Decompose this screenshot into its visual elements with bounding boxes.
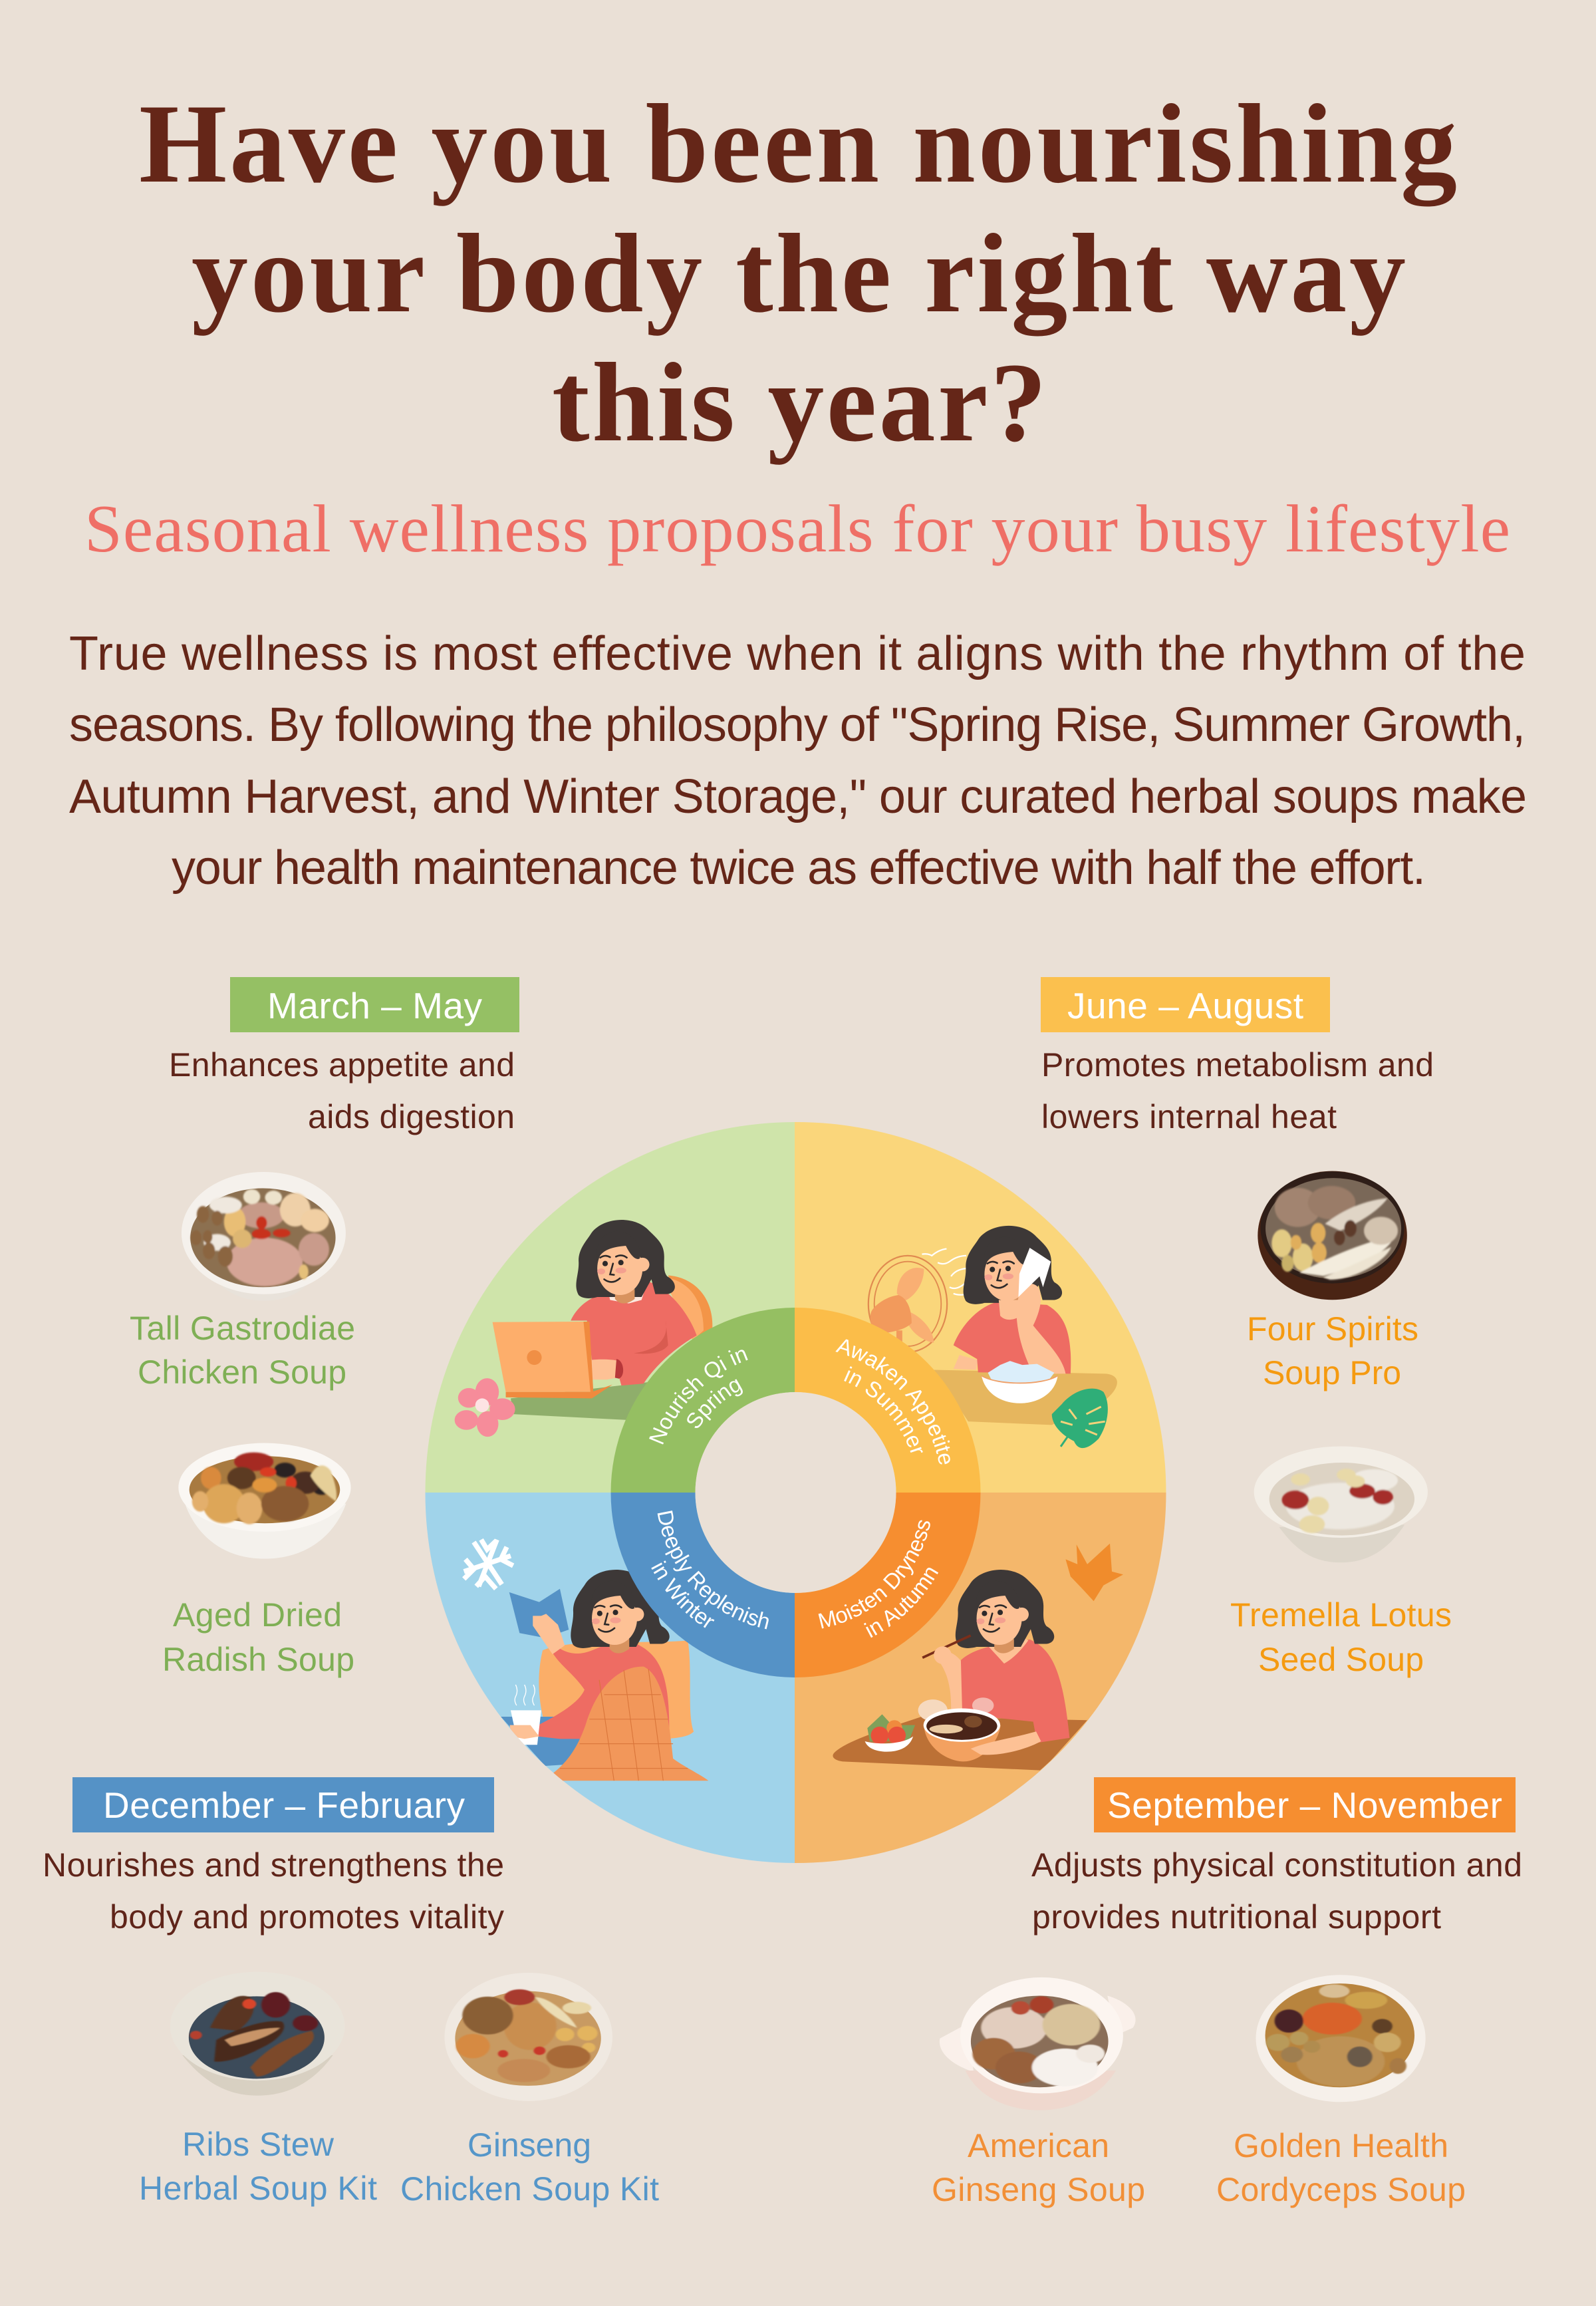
autumn benefit text: Adjusts physical constitution and: [1031, 1846, 1522, 1884]
soup label: american ginseng soup: [932, 2127, 1145, 2208]
soup label: four spirits soup pro: [1247, 1310, 1418, 1391]
blanket: [543, 1667, 708, 1781]
soup photo: ribs stew herbal soup kit: [170, 1972, 345, 2096]
soup photo: tremella lotus seed soup: [1254, 1446, 1428, 1562]
soup label: golden health cordyceps soup: Golden Health: [1234, 2127, 1448, 2164]
soup label: ginseng chicken soup kit: Chicken Soup Kit: [400, 2170, 659, 2208]
icon: fruit plate: [865, 1714, 915, 1752]
soup photo: american ginseng soup: [940, 1977, 1136, 2110]
season tag: June – August: June – August: [1067, 985, 1303, 1026]
icon: snowflake: [464, 1540, 513, 1589]
wheel quadrant: autumn background: [795, 1493, 1166, 1863]
illustration: autumn woman eating soup: [833, 1570, 1087, 1771]
inner ring: summer segment: [795, 1308, 980, 1493]
panel: summer: [1041, 977, 1452, 1678]
wheel quadrant: summer background: [795, 1122, 1166, 1493]
season tag: March – May: March – May: [267, 985, 483, 1026]
inner ring: autumn segment: [795, 1493, 980, 1677]
soup photo: aged dried radish soup: [178, 1443, 351, 1559]
ring label: summer: Awaken Appetite: [835, 1340, 950, 1465]
autumn benefit text: provides nutritional support: [1032, 1898, 1441, 1936]
soup label: american ginseng soup: American: [968, 2127, 1109, 2164]
soup label: tremella lotus seed soup: [1230, 1596, 1452, 1678]
soup label: aged dried radish soup: Radish Soup: [162, 1641, 354, 1678]
winter benefit text: body and promotes vitality: [110, 1898, 504, 1936]
season tag: September – November: [1094, 1777, 1516, 1832]
inner ring: spring segment: [610, 1308, 795, 1493]
summer benefit text: lowers internal heat: [1041, 1098, 1337, 1135]
illustration: summer woman with fan and ice bowl: [868, 1226, 1117, 1425]
soup label: golden health cordyceps soup: Cordyceps Soup: [1216, 2171, 1466, 2208]
season tag: June – August: [1041, 977, 1330, 1032]
fan: [868, 1256, 947, 1352]
inner ring: winter segment: [610, 1493, 795, 1677]
intro paragraph: seasons. By following the philosophy of "Spring Rise, Summer Growth,: [69, 698, 1526, 752]
icon: monstera leaf: [1052, 1389, 1108, 1448]
seasonal wheel: [426, 1122, 1166, 1863]
soup label: four spirits soup pro: Four Spirits: [1247, 1310, 1418, 1348]
soup label: ribs stew herbal soup kit: Herbal Soup Kit: [139, 2170, 377, 2207]
title: your body the right way: [192, 211, 1406, 336]
soup label: four spirits soup pro: Soup Pro: [1263, 1354, 1401, 1391]
icon: ice bowl: [982, 1361, 1058, 1403]
wheel quadrant: spring background: [426, 1122, 795, 1493]
soup photo: golden health cordyceps soup: [1256, 1975, 1426, 2102]
ring label: winter: Deeply Replenish: [657, 1511, 769, 1630]
title: this year?: [552, 340, 1047, 465]
soup photo: tall gastrodiae chicken soup: [182, 1172, 346, 1301]
illustration: winter woman reading: [501, 1570, 708, 1781]
ring label: winter: in Winter: [651, 1560, 714, 1628]
soup label: tall gastrodiae chicken soup: Chicken Soup: [138, 1354, 346, 1391]
autumn benefit text: [1031, 1846, 1522, 1936]
illustrations layer: [455, 1220, 1123, 1781]
soup label: aged dried radish soup: Aged Dried: [173, 1596, 342, 1634]
summer benefit text: Promotes metabolism and: [1041, 1046, 1434, 1083]
panel: autumn: [932, 1777, 1522, 2208]
winter benefit text: [43, 1846, 504, 1936]
subtitle: Seasonal wellness proposals for your busy lifestyle: [84, 492, 1510, 567]
season tag: September – November: September – November: [1107, 1785, 1502, 1826]
book: [509, 1589, 569, 1638]
soup label: american ginseng soup: Ginseng Soup: [932, 2171, 1145, 2208]
icon: cherry blossom: [455, 1378, 515, 1437]
soup label: tall gastrodiae chicken soup: Tall Gastrodiae: [130, 1310, 355, 1347]
intro paragraph: [69, 627, 1527, 895]
ring label: spring: Spring: [687, 1379, 743, 1428]
intro paragraph: Autumn Harvest, and Winter Storage," our curated herbal soups make: [69, 770, 1527, 823]
soup photo: ginseng chicken soup kit: [444, 1973, 612, 2101]
spring benefit text: Enhances appetite and: [169, 1046, 515, 1083]
title: [139, 81, 1457, 465]
intro paragraph: True wellness is most effective when it aligns with the rhythm of the: [69, 627, 1526, 680]
panel: winter: [43, 1777, 659, 2208]
winter benefit text: Nourishes and strengthens the: [43, 1846, 504, 1884]
panel: spring: [130, 977, 519, 1678]
soup label: tall gastrodiae chicken soup: [130, 1310, 355, 1391]
season tag: December – February: December – February: [103, 1785, 466, 1826]
spring benefit text: aids digestion: [308, 1098, 515, 1135]
soup label: ribs stew herbal soup kit: Ribs Stew: [182, 2126, 334, 2163]
illustration: spring woman at laptop: [493, 1220, 712, 1420]
ring label: autumn: Moisten Dryness: [818, 1520, 930, 1628]
soup label: ribs stew herbal soup kit: [139, 2126, 377, 2207]
spring benefit text: [169, 1046, 515, 1135]
icon: soup bowl with steam: [918, 1697, 1041, 1761]
intro paragraph: your health maintenance twice as effective with half the effort.: [172, 841, 1426, 895]
soup label: aged dried radish soup: [162, 1596, 354, 1678]
ring label: spring: Nourish Qi in: [649, 1350, 748, 1445]
season tag: December – February: [72, 1777, 494, 1832]
ring label: autumn: in Autumn: [863, 1568, 938, 1638]
soup photo: four spirits soup pro: [1258, 1171, 1407, 1300]
soup label: golden health cordyceps soup: [1216, 2127, 1466, 2208]
soup label: tremella lotus seed soup: Tremella Lotus: [1230, 1596, 1452, 1634]
wheel centre hole: [696, 1392, 896, 1593]
soup label: ginseng chicken soup kit: Ginseng: [467, 2126, 591, 2164]
title: Have you been nourishing: [139, 81, 1457, 206]
cup: [511, 1710, 541, 1745]
wheel quadrant: winter background: [426, 1493, 795, 1863]
season tag: March – May: [230, 977, 519, 1032]
icon: maple leaf: [1065, 1544, 1123, 1601]
summer benefit text: [1041, 1046, 1434, 1135]
ring label: summer: in Summer: [844, 1366, 923, 1453]
soup label: tremella lotus seed soup: Seed Soup: [1258, 1641, 1424, 1678]
soup label: ginseng chicken soup kit: [400, 2126, 659, 2208]
